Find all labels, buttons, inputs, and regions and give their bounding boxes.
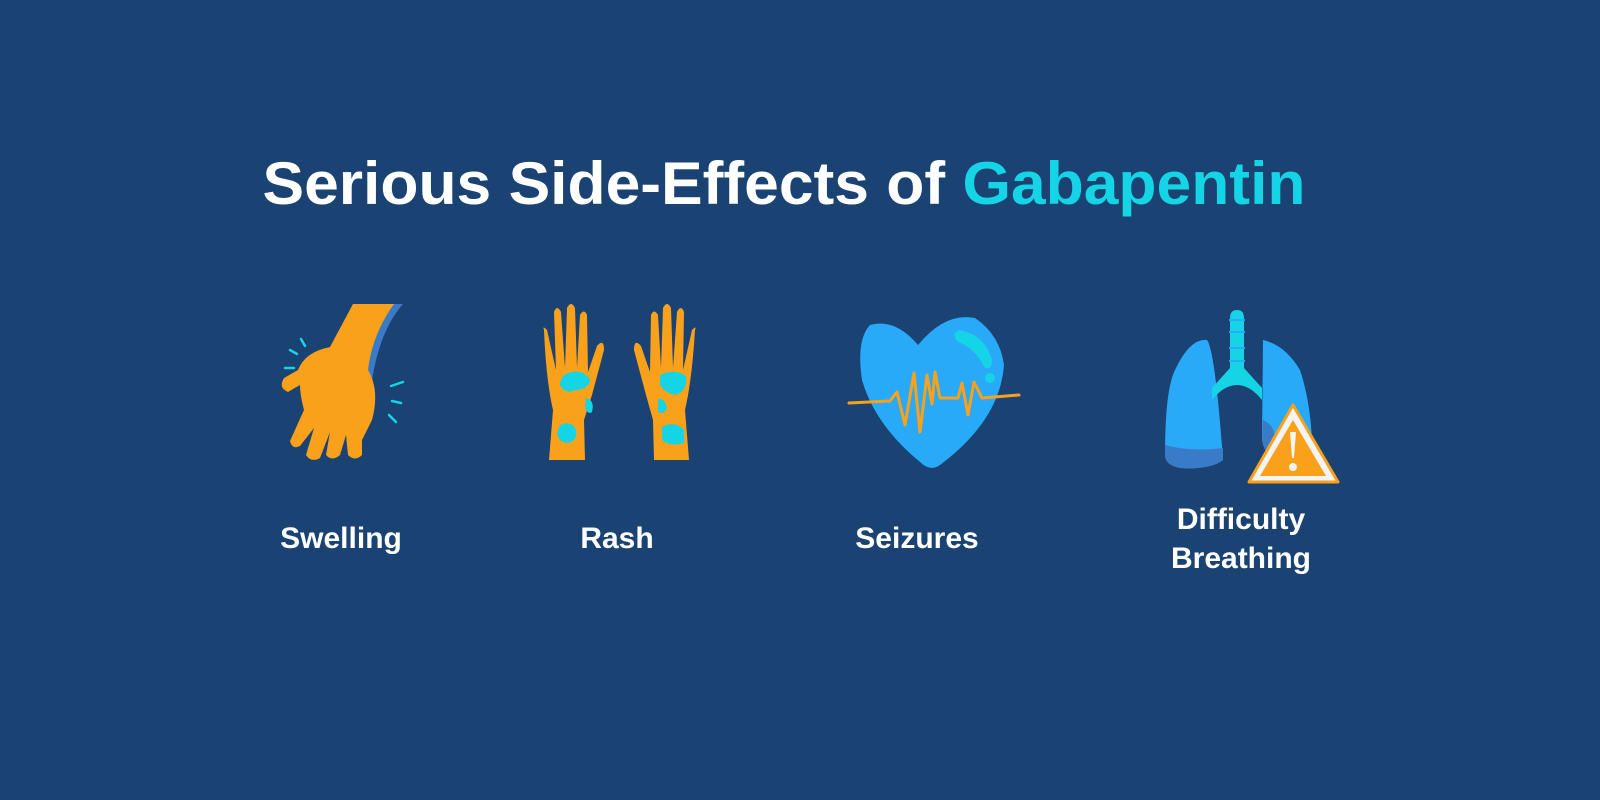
- label: seizures: Seizures: [855, 522, 979, 555]
- label: difficulty breathing: Difficulty: [1177, 503, 1305, 536]
- icon: lungs with warning: [1165, 310, 1338, 482]
- label: difficulty breathing: Breathing: [1171, 542, 1311, 575]
- icon: swollen hand: [282, 304, 403, 460]
- title: Serious Side-Effects of Gabapentin: [262, 150, 1306, 217]
- icon: heart with heartbeat: [849, 317, 1019, 468]
- icon: rash hands: [543, 304, 696, 460]
- label: rash: Rash: [580, 522, 654, 555]
- label: swelling: Swelling: [280, 522, 402, 555]
